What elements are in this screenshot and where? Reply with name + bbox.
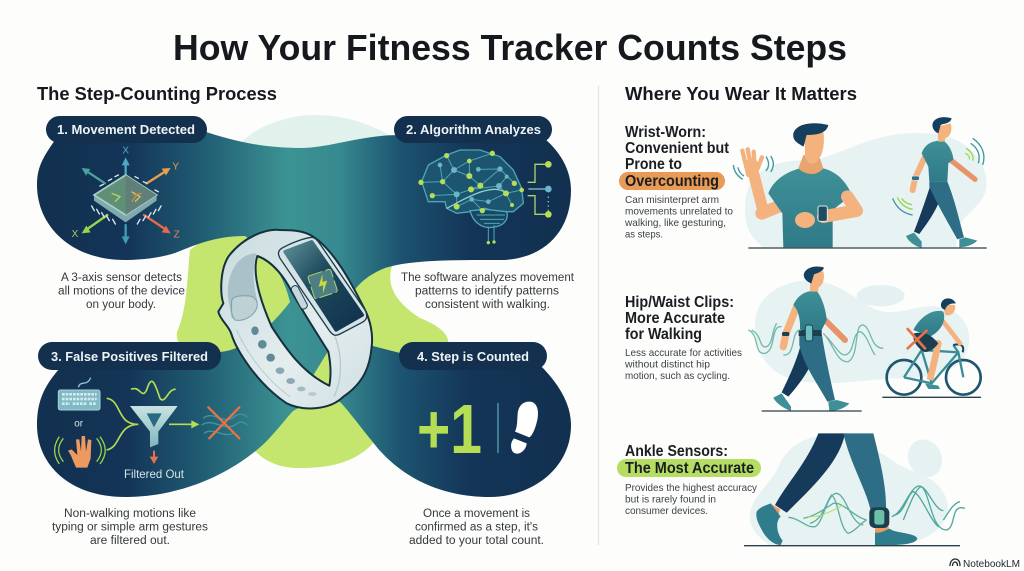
step 3 description: are filtered out. [90, 535, 170, 547]
step 4 description: confirmed as a step, it's [415, 522, 538, 534]
illustration: hip clip walker and cyclist [748, 266, 981, 411]
ankle description [625, 482, 758, 517]
step 4 description [409, 508, 544, 547]
step 3 label pill [38, 342, 221, 370]
step 4 label pill: 4. Step is Counted [417, 349, 529, 364]
wrist heading: Convenient but [625, 140, 730, 157]
wrist heading: Prone to [625, 156, 682, 173]
icon: 3-axis sensor chip: Z [174, 229, 180, 240]
wrist heading: Wrist-Worn: [625, 124, 706, 141]
icon: filter diagram: Filtered Out [124, 468, 185, 481]
wrist description: movements unrelated to [625, 206, 733, 218]
hip description: Less accurate for activities [625, 347, 742, 359]
step 1 label pill: 1. Movement Detected [57, 122, 195, 137]
ankle description: but is rarely found in [625, 494, 716, 506]
step 1 description: on your body. [86, 299, 156, 311]
step 3 label pill: 3. False Positives Filtered [51, 349, 208, 364]
illustration: wrist figures [733, 117, 987, 248]
icon: filter diagram: or [74, 419, 84, 430]
step 2 label pill [394, 116, 552, 143]
panel: step 3 false positives filtered [38, 342, 247, 547]
hip description [624, 347, 742, 382]
ankle heading [617, 443, 761, 477]
plus one counter: +1 [417, 390, 482, 468]
ankle description: Provides the highest accuracy [625, 482, 758, 494]
wrist heading: Overcounting [625, 173, 719, 190]
wrist heading [619, 124, 730, 190]
hip heading: More Accurate [625, 310, 725, 327]
ankle heading: Ankle Sensors: [625, 443, 728, 460]
panel: step 2 algorithm analyzes [394, 116, 575, 311]
icon: filter diagram [55, 378, 247, 481]
step 1 label pill [46, 116, 207, 143]
ankle description: consumer devices. [625, 505, 708, 517]
hip description: without distinct hip [624, 358, 710, 370]
heading: where you wear it matters: Where You Wear It Matters [625, 84, 857, 104]
step 3 description: typing or simple arm gestures [52, 522, 208, 534]
wrist description: as steps. [625, 228, 663, 240]
wrist description: walking, like gesturing, [624, 217, 726, 229]
step 4 description: added to your total count. [409, 535, 544, 547]
step 1 description [58, 272, 185, 311]
illustration: ankle sensor legs [744, 433, 965, 546]
panel: hip and waist clips [624, 266, 981, 411]
panel: step 1 movement detected [46, 116, 207, 311]
hip heading [625, 294, 734, 343]
panel: step 4 step is counted [399, 342, 547, 547]
step 3 description: Non-walking motions like [64, 508, 196, 520]
step 1 description: all motions of the device [58, 286, 185, 298]
step 1 description: A 3-axis sensor detects [61, 272, 182, 284]
icon: 3-axis sensor chip: X [122, 146, 129, 157]
hip heading: for Walking [625, 326, 702, 343]
step 4 label pill [399, 342, 547, 370]
wrist description [624, 194, 733, 240]
icon: neural network brain [418, 150, 552, 244]
man walking [893, 117, 984, 248]
step 4 description: Once a movement is [423, 508, 530, 520]
icon: 3-axis sensor chip: X [72, 229, 79, 240]
title: How Your Fitness Tracker Counts Steps [173, 27, 847, 68]
heading: the step-counting process: The Step-Counting Process [37, 84, 277, 104]
step 3 description [52, 508, 208, 547]
hip description: motion, such as cycling. [625, 370, 730, 382]
step 2 label pill: 2. Algorithm Analyzes [406, 122, 541, 137]
logo: NotebookLM: NotebookLM [963, 558, 1020, 570]
icon: footprint [511, 402, 538, 454]
panel: process diagram background [37, 115, 571, 497]
ankle heading: The Most Accurate [625, 460, 754, 477]
wrist description: Can misinterpret arm [625, 194, 719, 206]
walking man with clip [748, 266, 883, 411]
icon: 3-axis sensor chip: Y [172, 162, 179, 173]
step 2 description: The software analyzes movement [401, 272, 575, 284]
man checking watch [733, 123, 857, 247]
step 2 description [401, 272, 575, 311]
illustration: fitness band [218, 230, 372, 408]
hip heading: Hip/Waist Clips: [625, 294, 734, 311]
icon: 3-axis sensor chip [72, 146, 180, 244]
cyclist with cross mark [887, 298, 981, 395]
panel: ankle sensors [617, 433, 965, 546]
panel: wrist-worn [619, 117, 987, 248]
step 2 description: patterns to identify patterns [415, 286, 559, 298]
step 2 description: consistent with walking. [425, 299, 550, 311]
